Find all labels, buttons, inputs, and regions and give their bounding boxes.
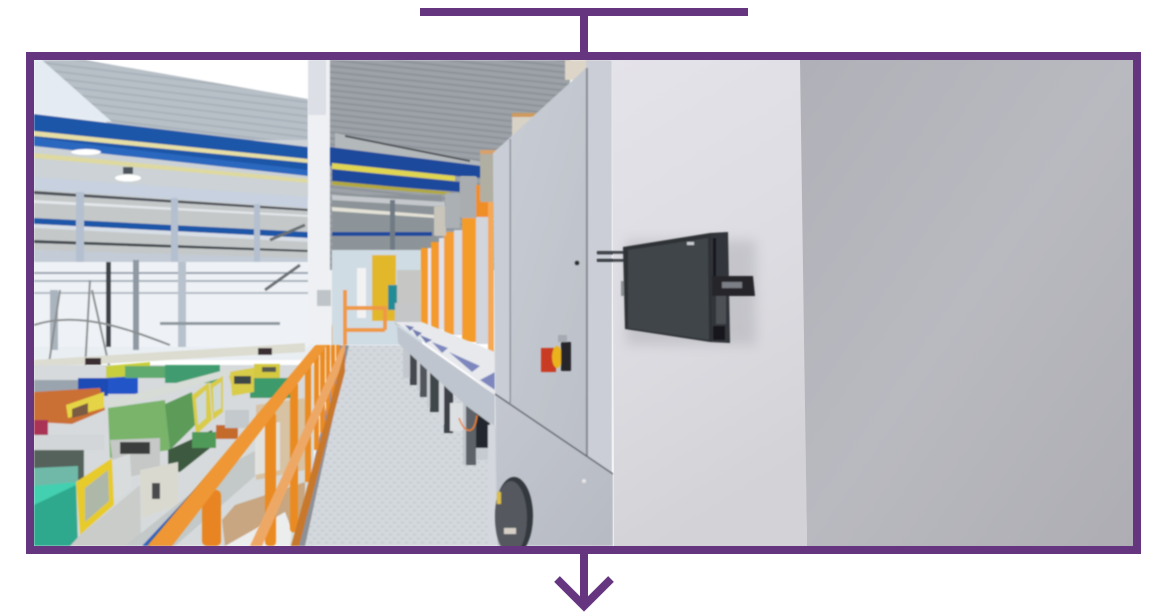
wall: lit section	[612, 60, 807, 546]
photo: factory interior	[34, 60, 1133, 555]
machines area	[34, 362, 314, 546]
side panel	[711, 233, 729, 342]
down arrow	[557, 553, 611, 606]
grey machine cabinet	[493, 60, 625, 546]
antennas	[597, 251, 626, 262]
DIN bracket	[712, 276, 755, 296]
top connector bar	[420, 8, 748, 53]
central white pillar	[308, 60, 332, 345]
control counter with legs	[395, 322, 496, 545]
wheel disc	[495, 477, 533, 555]
walkway floor and orange railing	[147, 312, 497, 546]
microinverter device	[597, 232, 755, 343]
left hall background	[34, 60, 334, 370]
back row beam	[34, 343, 305, 368]
far hall: ceiling and beams right of pillar	[330, 60, 570, 345]
teal machine and yellow door	[34, 480, 78, 546]
logo plate	[687, 242, 694, 245]
cardboard boxes	[256, 398, 310, 480]
face	[628, 238, 709, 340]
device shadow	[626, 240, 756, 345]
red emergency switch	[541, 335, 571, 372]
orange silos and hoppers	[421, 60, 590, 353]
purple photo frame	[30, 56, 1137, 550]
wall: shaded section	[800, 60, 1133, 546]
back equipment	[332, 250, 422, 345]
casing	[623, 232, 730, 343]
clip	[620, 280, 624, 297]
